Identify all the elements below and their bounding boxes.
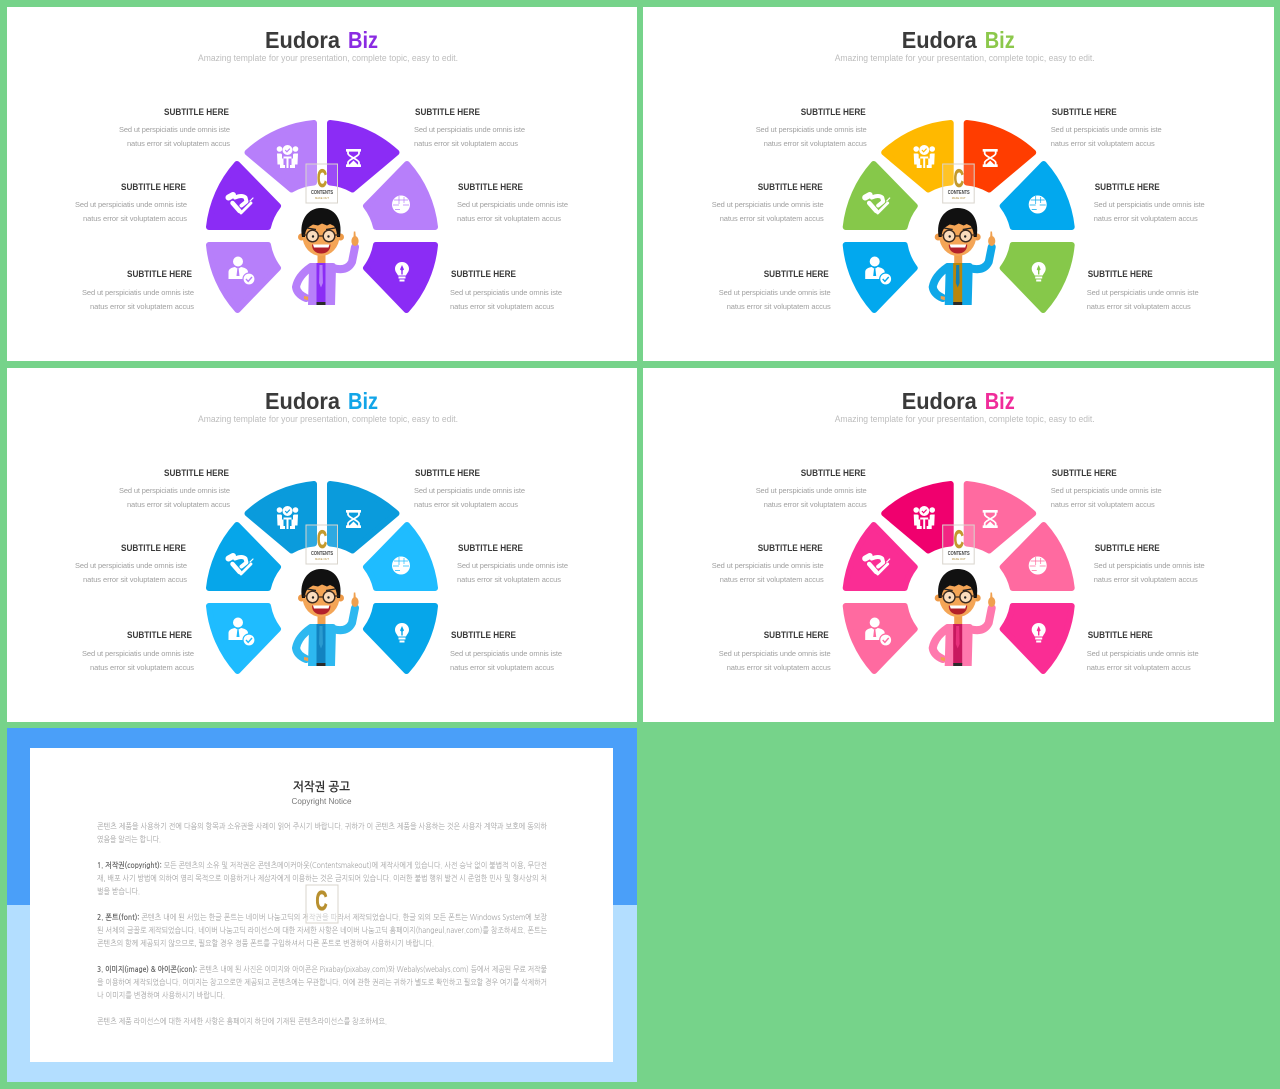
- text block: middle left: [75, 543, 187, 584]
- text block: bottom right: [1087, 630, 1199, 672]
- segment: top left with team icon: [884, 484, 951, 550]
- text block: middle right: [457, 182, 568, 223]
- text block: bottom right: natus error sit voluptatem accus: [1087, 663, 1191, 672]
- text block: top left: natus error sit voluptatem accus: [127, 139, 230, 148]
- text block: bottom left: natus error sit voluptatem accus: [727, 663, 831, 672]
- text block: bottom right: SUBTITLE HERE: [451, 630, 516, 641]
- text block: top right: natus error sit voluptatem accus: [414, 139, 518, 148]
- text block: bottom left: Sed ut perspiciatis unde omnis iste: [719, 649, 831, 658]
- watermark: [943, 525, 974, 564]
- title: Biz: [985, 27, 1015, 53]
- text block: middle left: SUBTITLE HERE: [758, 543, 823, 554]
- subtitle line: Amazing template for your presentation, complete topic, easy to edit.: [835, 53, 1095, 63]
- panel: purple slide: [7, 7, 637, 361]
- text block: top right: natus error sit voluptatem accus: [414, 500, 518, 509]
- text block: top left: natus error sit voluptatem accus: [764, 139, 867, 148]
- title: Biz: [348, 388, 378, 414]
- text block: middle left: SUBTITLE HERE: [121, 182, 186, 193]
- text block: bottom left: Sed ut perspiciatis unde omnis iste: [82, 649, 194, 658]
- segment: middle left with handshake icon: [209, 525, 278, 588]
- segment: bottom left with person icon: [846, 606, 915, 671]
- character: [296, 208, 359, 305]
- text block: middle right: SUBTITLE HERE: [1095, 543, 1160, 554]
- text block: top left: natus error sit voluptatem accus: [127, 500, 230, 509]
- title: Eudora: [902, 27, 977, 53]
- intro paragraph: 콘텐츠 제품을 사용하기 전에 다음의 항목과 소유권을 사례이 읽어 주시기 바랍니다. 귀하가 이 콘텐츠 제품을 사용하는 것은 사용자 계약과 보호에 동의하: [97, 822, 547, 831]
- text block: middle left: natus error sit voluptatem accus: [83, 575, 187, 584]
- text block: middle right: SUBTITLE HERE: [1095, 182, 1160, 193]
- panel background: upper blue band: [7, 728, 637, 905]
- panel: multicolour slide: [643, 7, 1274, 361]
- text block: middle right: Sed ut perspiciatis unde omnis iste: [1094, 561, 1205, 570]
- watermark: [306, 885, 338, 923]
- text block: bottom left: SUBTITLE HERE: [764, 630, 829, 641]
- text block: bottom left: natus error sit voluptatem accus: [90, 302, 194, 311]
- segment: middle right with globe icon: [366, 525, 435, 588]
- text block: top left: [119, 107, 230, 148]
- text block: top left: Sed ut perspiciatis unde omnis iste: [756, 125, 867, 134]
- segment: middle right with globe icon: [1003, 164, 1072, 227]
- clause 1: copyright: 재, 배포 사기 방법에 의하여 영리 목적으로 이용하거나 제삼자에게 이용하는 것은 금지되어 있습니다. 이러한 불법 행위 발견 시 준엄한 민사 및 형사상의 처: [97, 874, 547, 883]
- title: Eudora: [265, 27, 340, 53]
- text block: bottom left: natus error sit voluptatem accus: [727, 302, 831, 311]
- segment: middle left with handshake icon: [209, 164, 278, 227]
- text block: middle left: natus error sit voluptatem accus: [83, 214, 187, 223]
- text block: middle left: Sed ut perspiciatis unde omnis iste: [712, 561, 824, 570]
- segment: top left with team icon: [248, 123, 314, 190]
- segment: bottom left with person icon: [209, 245, 278, 310]
- text block: top right: Sed ut perspiciatis unde omnis iste: [414, 486, 525, 495]
- text block: bottom right: SUBTITLE HERE: [1088, 269, 1153, 280]
- text block: bottom right: Sed ut perspiciatis unde omnis iste: [450, 649, 562, 658]
- clause 1: copyright: 1. 저작권(copyright): 모든 콘텐츠의 소유 및 저작권은 콘텐츠메이커아웃(Contentsmakeout)에 제작사에게 있습니다. 사전 승낙 없이 불법적 이용, 무단전: [97, 860, 547, 870]
- text block: top right: [414, 107, 525, 148]
- text block: top left: Sed ut perspiciatis unde omnis iste: [119, 486, 230, 495]
- text block: bottom left: [719, 630, 831, 672]
- clause 2: font: [97, 912, 547, 948]
- text block: middle right: Sed ut perspiciatis unde omnis iste: [1094, 200, 1205, 209]
- text block: top right: Sed ut perspiciatis unde omnis iste: [1051, 486, 1162, 495]
- text block: top left: [756, 107, 867, 148]
- clause 1: copyright: [97, 860, 547, 896]
- segment: top left with team icon: [248, 484, 314, 550]
- text block: bottom left: SUBTITLE HERE: [764, 269, 829, 280]
- clause 3: image and icon: 3. 이미지(image) & 아이콘(icon): 콘텐츠 내에 된 사진은 이미지와 아이콘은 Pixabay(pixabay.com)와 Webalys(webalys.com) 등에서 제공된 무료 저작물: [97, 964, 547, 974]
- text block: top right: natus error sit voluptatem accus: [1051, 500, 1155, 509]
- clause 2: font: 콘텐츠의 함께 제공되지 않으므로, 필요할 경우 정품 폰트를 구입하셔서 다른 폰트로 변경하여 사용하시기 바랍니다.: [97, 939, 434, 948]
- text block: bottom right: SUBTITLE HERE: [451, 269, 516, 280]
- text block: top left: SUBTITLE HERE: [801, 468, 866, 479]
- text block: middle right: [1094, 543, 1205, 584]
- text block: top left: [119, 468, 230, 509]
- panel: blue slide: [7, 368, 637, 722]
- text block: bottom right: [1087, 269, 1199, 311]
- panel background: lower light blue band: [7, 905, 637, 1082]
- text block: top right: [414, 468, 525, 509]
- text block: middle left: natus error sit voluptatem accus: [720, 575, 824, 584]
- text block: top right: Sed ut perspiciatis unde omnis iste: [414, 125, 525, 134]
- character: [933, 569, 995, 666]
- clause 2: font: 2. 폰트(font): 콘텐츠 내에 된 서있는 한글 폰트는 네이버 나눔고딕의 저작권을 따라서 제작되었습니다. 한글 외의 모든 폰트는 Windows System에 보장: [97, 912, 547, 922]
- text block: bottom right: Sed ut perspiciatis unde omnis iste: [1087, 649, 1199, 658]
- text block: middle left: Sed ut perspiciatis unde omnis iste: [75, 200, 187, 209]
- text block: middle right: Sed ut perspiciatis unde omnis iste: [457, 561, 568, 570]
- watermark: [943, 164, 974, 203]
- text block: top left: [756, 468, 867, 509]
- text block: top left: SUBTITLE HERE: [164, 468, 229, 479]
- text block: middle left: Sed ut perspiciatis unde omnis iste: [712, 200, 824, 209]
- title: Eudora: [902, 388, 977, 414]
- segment: middle right with globe icon: [366, 164, 435, 227]
- text block: top right: SUBTITLE HERE: [415, 107, 480, 118]
- text block: bottom right: natus error sit voluptatem accus: [450, 663, 554, 672]
- text block: middle left: SUBTITLE HERE: [758, 182, 823, 193]
- text block: top left: SUBTITLE HERE: [801, 107, 866, 118]
- text block: top right: SUBTITLE HERE: [1052, 468, 1117, 479]
- text block: middle right: [1094, 182, 1205, 223]
- segment: bottom right with bulb icon: [366, 245, 435, 310]
- panel: copyright notice: [7, 728, 637, 1082]
- text block: middle left: Sed ut perspiciatis unde omnis iste: [75, 561, 187, 570]
- text block: middle left: [712, 182, 824, 223]
- text block: middle right: natus error sit voluptatem accus: [457, 214, 561, 223]
- text block: top right: [1051, 107, 1162, 148]
- text block: bottom right: Sed ut perspiciatis unde omnis iste: [450, 288, 562, 297]
- text block: bottom right: SUBTITLE HERE: [1088, 630, 1153, 641]
- subtitle line: Amazing template for your presentation, complete topic, easy to edit.: [835, 414, 1095, 424]
- segment: bottom right with bulb icon: [1003, 606, 1072, 671]
- text block: bottom left: Sed ut perspiciatis unde omnis iste: [82, 288, 194, 297]
- clause 2: font: 된 서체의 글꼴로 제작되었습니다. 네이버 나눔고딕 라이선스에 대한 자세한 사항은 네이버 나눔고딕 홈페이지(hangeul.naver.com)를 참조하세요. 폰트는: [97, 925, 547, 935]
- text block: bottom right: natus error sit voluptatem accus: [450, 302, 554, 311]
- text block: bottom left: [719, 269, 831, 311]
- text block: bottom left: natus error sit voluptatem accus: [90, 663, 194, 672]
- clause 1: copyright: 벌을 받습니다.: [97, 887, 140, 896]
- segment: bottom left with person icon: [209, 606, 278, 671]
- text block: top right: Sed ut perspiciatis unde omnis iste: [1051, 125, 1162, 134]
- character: [296, 569, 359, 666]
- segment: bottom right with bulb icon: [366, 606, 435, 671]
- clause 3: image and icon: 을 이용하여 제작되었습니다. 이미지는 참고으로만 제공되고 콘텐츠에는 무관합니다. 이에 관한 권리는 귀하가 별도로 확인하고 필요할 경우 여기를 삭제하거: [97, 978, 547, 987]
- text block: bottom left: [82, 630, 194, 672]
- title: Eudora: [265, 388, 340, 414]
- text block: bottom right: [450, 630, 562, 672]
- text block: top right: SUBTITLE HERE: [415, 468, 480, 479]
- watermark: [306, 164, 338, 203]
- title: Biz: [348, 27, 378, 53]
- title: Biz: [985, 388, 1015, 414]
- segment: middle left with handshake icon: [846, 525, 915, 588]
- text block: middle right: [457, 543, 568, 584]
- text block: bottom left: SUBTITLE HERE: [127, 269, 192, 280]
- panel: pink slide: [643, 368, 1274, 722]
- segment: bottom right with bulb icon: [1003, 245, 1072, 310]
- subtitle line: Amazing template for your presentation, complete topic, easy to edit.: [198, 53, 458, 63]
- text block: middle right: Sed ut perspiciatis unde omnis iste: [457, 200, 568, 209]
- text block: bottom right: [450, 269, 562, 311]
- segment: top right with hourglass icon: [967, 123, 1033, 190]
- text block: middle right: natus error sit voluptatem accus: [457, 575, 561, 584]
- text block: middle right: natus error sit voluptatem accus: [1094, 575, 1198, 584]
- character: [933, 208, 995, 305]
- intro paragraph: 였음을 알리는 합니다.: [97, 835, 161, 844]
- text block: bottom right: Sed ut perspiciatis unde omnis iste: [1087, 288, 1199, 297]
- text block: middle left: SUBTITLE HERE: [121, 543, 186, 554]
- segment: top right with hourglass icon: [967, 484, 1033, 550]
- clause 3: image and icon: 나 이미지를 변경하여 사용하시기 바랍니다.: [97, 991, 225, 1000]
- segment: top left with team icon: [884, 123, 951, 190]
- watermark: [306, 525, 338, 564]
- text block: top left: natus error sit voluptatem accus: [764, 500, 867, 509]
- notice card: [30, 748, 613, 1062]
- notice subheading: Copyright Notice: [292, 796, 352, 806]
- text block: middle left: [75, 182, 187, 223]
- segment: middle left with handshake icon: [846, 164, 915, 227]
- text block: bottom left: Sed ut perspiciatis unde omnis iste: [719, 288, 831, 297]
- subtitle line: Amazing template for your presentation, complete topic, easy to edit.: [198, 414, 458, 424]
- text block: bottom left: [82, 269, 194, 311]
- text block: middle left: [712, 543, 824, 584]
- text block: top left: SUBTITLE HERE: [164, 107, 229, 118]
- clause 3: image and icon: [97, 964, 547, 1000]
- notice heading: 저작권 공고: [293, 780, 350, 793]
- text block: top left: Sed ut perspiciatis unde omnis iste: [119, 125, 230, 134]
- text block: top left: Sed ut perspiciatis unde omnis iste: [756, 486, 867, 495]
- segment: middle right with globe icon: [1003, 525, 1072, 588]
- watermark: C: [316, 885, 328, 916]
- text block: middle left: natus error sit voluptatem accus: [720, 214, 824, 223]
- text block: bottom left: SUBTITLE HERE: [127, 630, 192, 641]
- segment: top right with hourglass icon: [330, 123, 396, 190]
- text block: top right: [1051, 468, 1162, 509]
- segment: bottom left with person icon: [846, 245, 915, 310]
- text block: top right: SUBTITLE HERE: [1052, 107, 1117, 118]
- text block: middle right: natus error sit voluptatem accus: [1094, 214, 1198, 223]
- closing note: 콘텐츠 제품 라이선스에 대한 자세한 사항은 홈페이지 하단에 기재된 콘텐츠라이선스를 참조하세요.: [97, 1017, 387, 1026]
- text block: bottom right: natus error sit voluptatem accus: [1087, 302, 1191, 311]
- text block: middle right: SUBTITLE HERE: [458, 543, 523, 554]
- text block: middle right: SUBTITLE HERE: [458, 182, 523, 193]
- intro paragraph: [97, 822, 547, 844]
- text block: top right: natus error sit voluptatem accus: [1051, 139, 1155, 148]
- segment: top right with hourglass icon: [330, 484, 396, 550]
